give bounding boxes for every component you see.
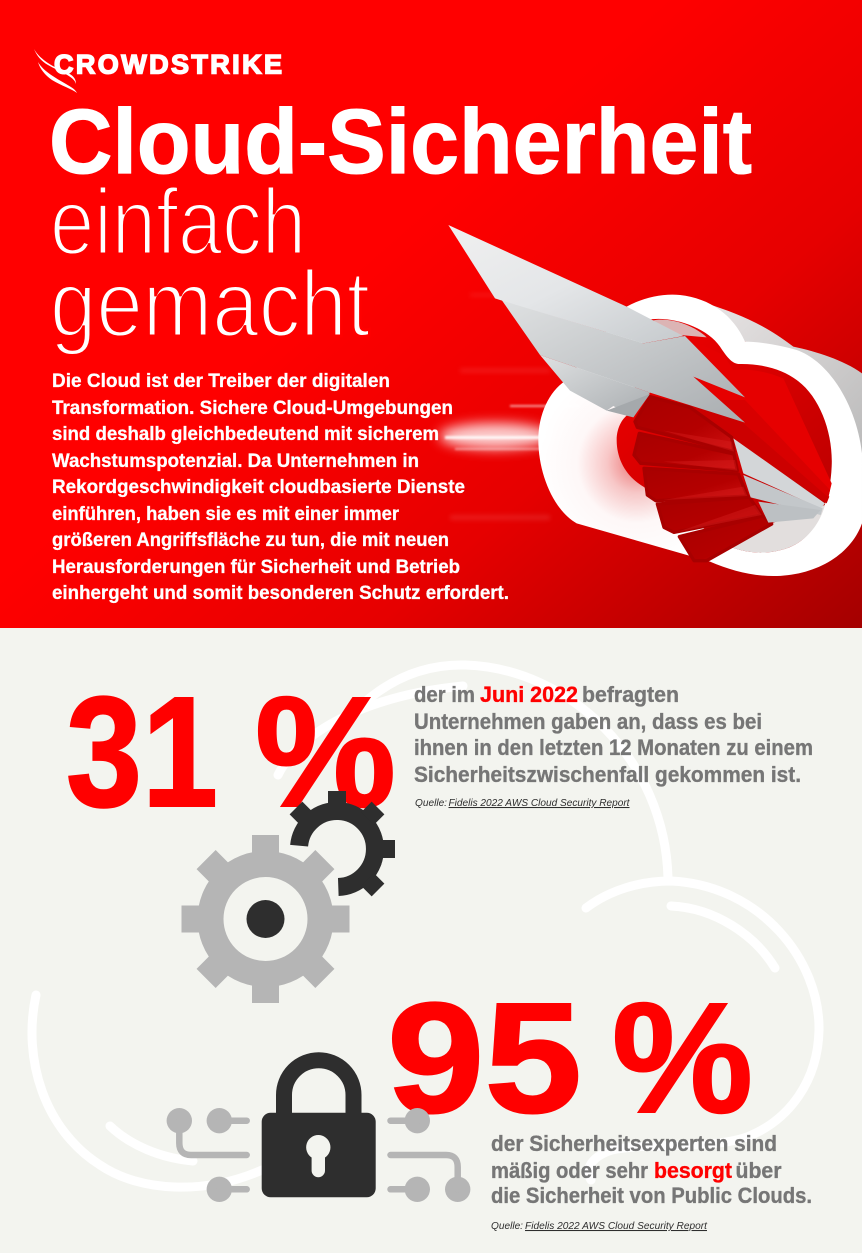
intro paragraph: Rekordgeschwindigkeit cloudbasierte Dienste xyxy=(52,476,465,498)
panel: red header xyxy=(0,0,862,628)
intro paragraph: größeren Angriffsfläche zu tun, die mit neuen xyxy=(52,529,449,551)
icon: gray gear xyxy=(182,835,350,1003)
stat text: 31 %: der im xyxy=(414,682,475,707)
stat text: 95 %: der Sicherheitsexperten sind xyxy=(491,1131,777,1156)
title light line 2: gemacht xyxy=(50,251,370,356)
stat text: 31 %: ihnen in den letzten 12 Monaten zu einem xyxy=(414,735,813,760)
stat text: 95 %: mäßig oder sehr xyxy=(491,1158,648,1183)
intro paragraph: Wachstumspotenzial. Da Unternehmen in xyxy=(52,450,419,472)
percent sign: % xyxy=(612,971,753,1146)
keyhole xyxy=(306,1135,330,1177)
source note 1: Quelle: xyxy=(415,797,447,809)
stat text: 31 %: Unternehmen gaben an, dass es bei xyxy=(414,709,762,734)
wing: gray folded feathers xyxy=(448,225,745,423)
padlock body xyxy=(262,1113,376,1197)
icon: dark gear xyxy=(290,791,395,896)
stat text: 95 %: besorgt xyxy=(654,1158,733,1183)
logo: CrowdStrike xyxy=(34,49,282,93)
intro paragraph: einhergeht und somit besonderen Schutz erfordert. xyxy=(52,582,509,604)
logo swoosh xyxy=(34,49,77,93)
stat: 31 % xyxy=(66,665,396,840)
stat text: 95 % xyxy=(491,1131,812,1208)
padlock shackle xyxy=(284,1060,354,1115)
cloud tube ring xyxy=(538,295,862,576)
illustration: winged cloud xyxy=(448,225,862,576)
tube interior shading xyxy=(652,320,707,337)
intro paragraph xyxy=(52,370,509,604)
intro paragraph: einführen, haben sie es mit einer immer xyxy=(52,503,399,525)
light streaks xyxy=(439,293,580,520)
lower gray feathers xyxy=(733,438,825,523)
tube interior floor xyxy=(730,505,825,553)
percent sign: % xyxy=(255,665,396,840)
stat text: 31 %: Juni 2022 xyxy=(480,682,578,707)
cloud extrusion xyxy=(707,303,862,467)
stat text: 31 %: befragten xyxy=(582,682,679,707)
title xyxy=(49,91,752,356)
source note 1: Fidelis 2022 AWS Cloud Security Report xyxy=(448,797,631,809)
intro paragraph: Herausforderungen für Sicherheit und Betrieb xyxy=(52,556,460,578)
big number 95: 95 xyxy=(387,971,582,1146)
logo wordmark: CROWDSTRIKE xyxy=(54,50,282,80)
card highlights xyxy=(663,431,762,532)
big number 31: 31 xyxy=(66,665,218,840)
circuit traces xyxy=(167,1108,470,1202)
stat text: 31 % xyxy=(414,682,813,787)
stat text: 95 %: über xyxy=(736,1158,782,1183)
upper red feathers xyxy=(683,336,832,503)
stat: 95 % xyxy=(387,971,753,1146)
icon: gears xyxy=(182,791,395,1003)
title bold line: Cloud-Sicherheit xyxy=(49,91,752,193)
source note 2: Fidelis 2022 AWS Cloud Security Report xyxy=(525,1220,708,1232)
stat text: 31 %: Sicherheitszwischenfall gekommen ist. xyxy=(414,762,801,787)
background cloud outline xyxy=(32,665,819,1187)
intro paragraph: Die Cloud ist der Treiber der digitalen xyxy=(52,370,390,392)
header background xyxy=(0,0,862,628)
source note 2: Quelle: xyxy=(491,1220,523,1232)
stat text: 95 %: die Sicherheit von Public Clouds. xyxy=(491,1183,812,1208)
title light line 1: einfach xyxy=(50,169,306,274)
icon: padlock with circuit xyxy=(167,1060,470,1202)
intro paragraph: Transformation. Sichere Cloud-Umgebungen xyxy=(52,397,453,419)
intro paragraph: sind deshalb gleichbedeutend mit sicherem xyxy=(52,423,439,445)
dark red cards xyxy=(634,397,772,561)
